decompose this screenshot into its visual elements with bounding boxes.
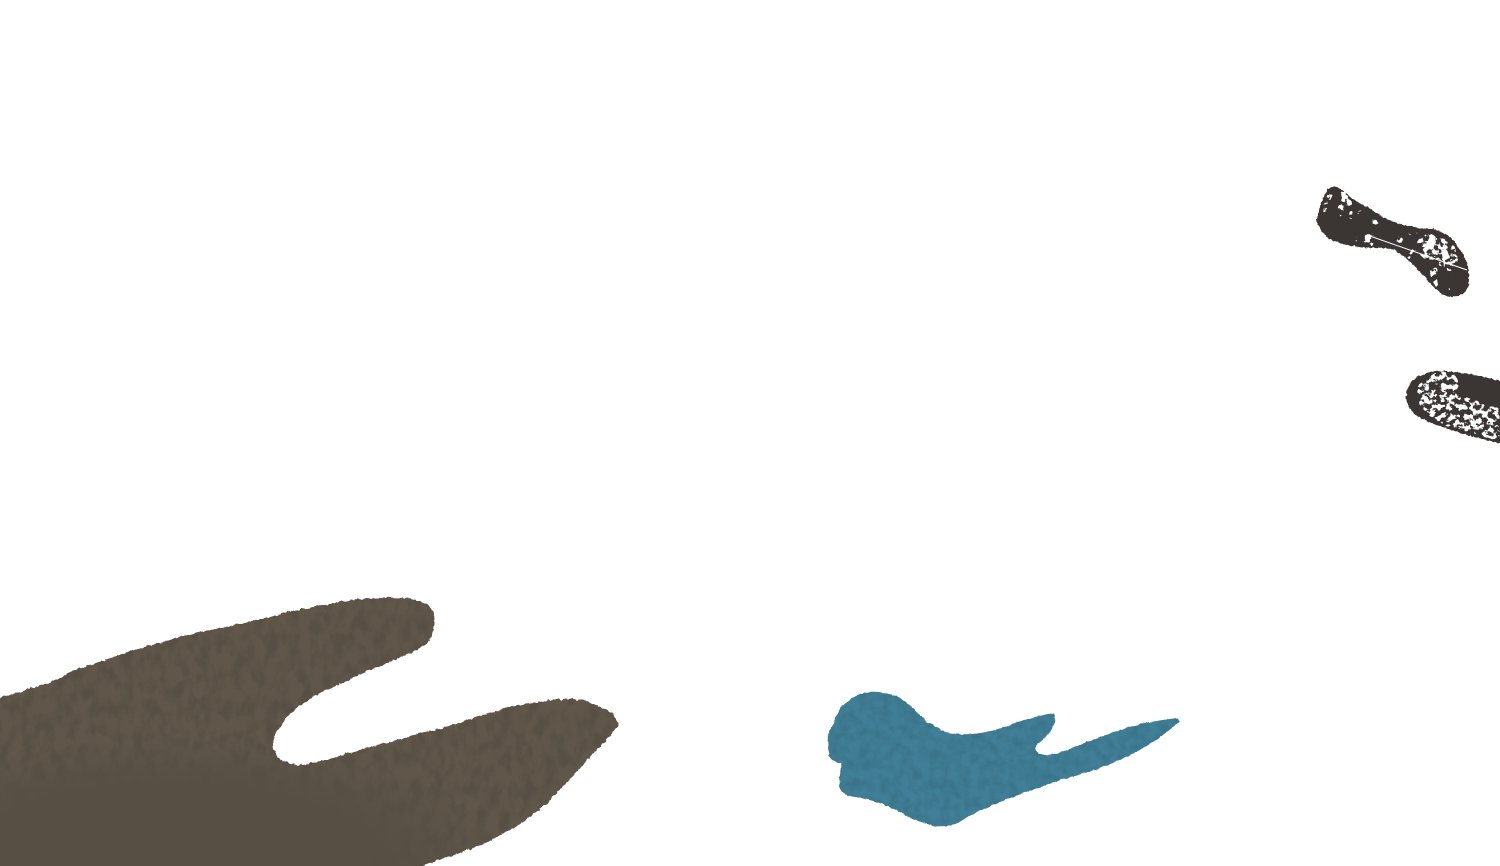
flecks on leaf bbox=[1321, 189, 1460, 293]
flecks on oval bbox=[1416, 370, 1500, 442]
shape: teal bird-like form bbox=[828, 692, 1179, 826]
shape: dark speckled leaf form bbox=[1316, 187, 1469, 297]
leaf vein bbox=[1367, 235, 1467, 270]
shape: large brown two-fingered form bbox=[0, 598, 618, 866]
shape: dark speckled oval form at right edge bbox=[1406, 370, 1500, 444]
solid fleck accents on leaf bbox=[1426, 236, 1450, 287]
brown mottled texture bbox=[0, 598, 618, 866]
